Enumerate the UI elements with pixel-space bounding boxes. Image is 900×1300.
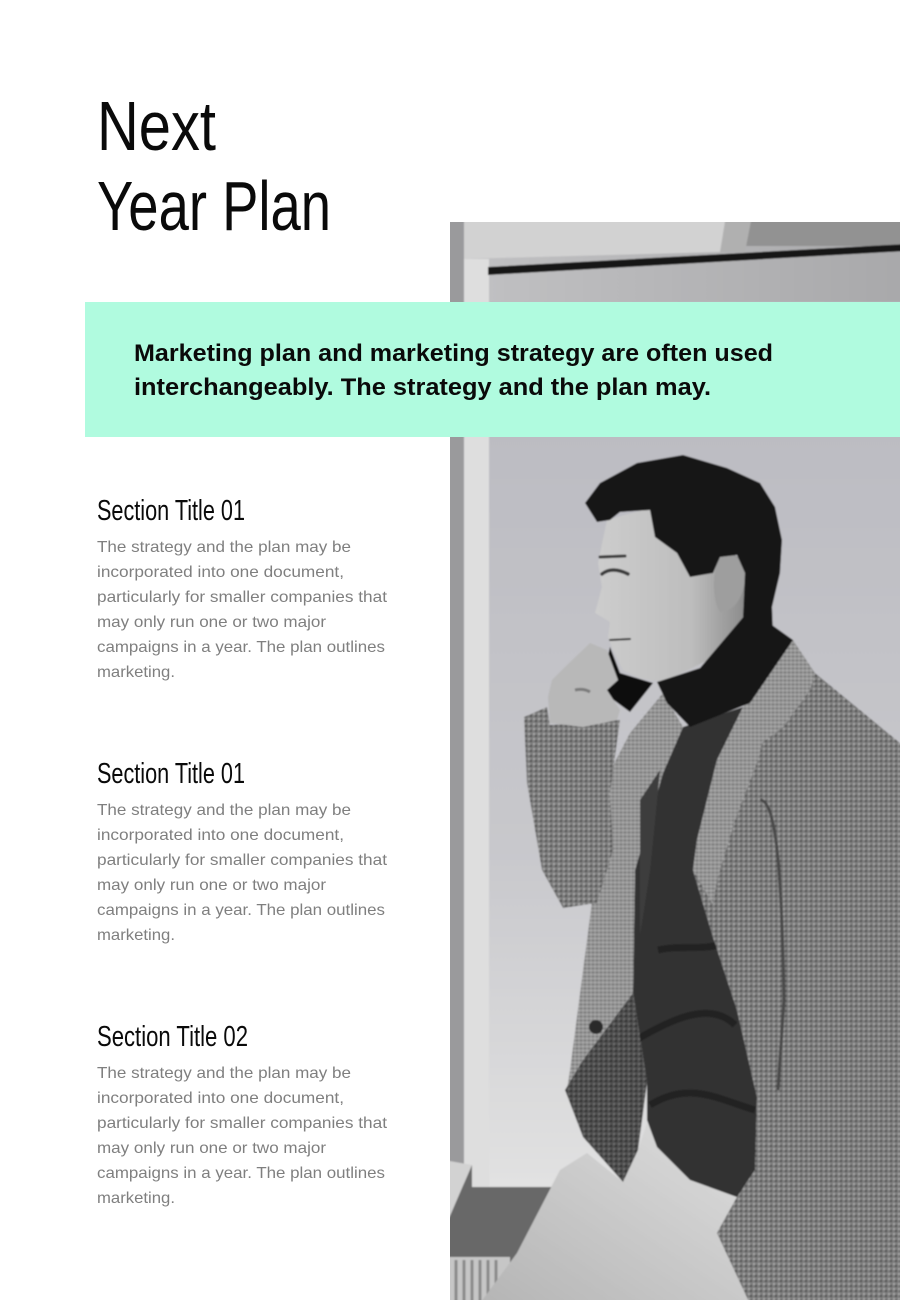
section 3 body: marketing. [97, 1190, 175, 1207]
jacket button [589, 1020, 603, 1034]
banner text [134, 340, 773, 401]
title [97, 87, 331, 245]
banner text: Marketing plan and marketing strategy are often used [134, 340, 773, 367]
section 1 [97, 495, 388, 681]
mint banner [85, 302, 900, 437]
section 3 body: incorporated into one document, [97, 1090, 344, 1107]
section 2 body: marketing. [97, 927, 175, 944]
section 2 [97, 758, 388, 944]
title line 2: Year Plan [97, 167, 331, 245]
photo background: floor and vent [450, 1160, 552, 1300]
section 3 body [97, 1065, 388, 1207]
face [596, 514, 746, 674]
photo background: wall and door [450, 222, 900, 1187]
section 3 [97, 1021, 388, 1207]
section 1 body: The strategy and the plan may be [97, 539, 351, 556]
hand finger shadow [575, 689, 590, 692]
section 2 heading: Section Title 01 [97, 758, 245, 790]
title line 1: Next [97, 87, 216, 165]
section 1 body: incorporated into one document, [97, 564, 344, 581]
jacket body and right sleeve [693, 673, 900, 1300]
phone [606, 647, 654, 712]
section 2 body: campaigns in a year. The plan outlines [97, 902, 385, 919]
section 3 body: The strategy and the plan may be [97, 1065, 351, 1082]
section 3 heading: Section Title 02 [97, 1021, 248, 1053]
section 1 body: particularly for smaller companies that [97, 589, 388, 606]
section 1 heading: Section Title 01 [97, 495, 245, 527]
jacket right lapel [693, 640, 815, 905]
section 2 body: The strategy and the plan may be [97, 802, 351, 819]
ear [714, 558, 746, 604]
hair [585, 455, 782, 633]
jacket inner dark flap [565, 993, 647, 1182]
section 1 body: may only run one or two major [97, 614, 327, 631]
raised arm sleeve [524, 707, 620, 908]
section 1 body: campaigns in a year. The plan outlines [97, 639, 385, 656]
section 2 body [97, 802, 388, 944]
banner text: interchangeably. The strategy and the plan may. [134, 374, 711, 401]
section 2 body: incorporated into one document, [97, 827, 344, 844]
jacket left front [567, 693, 683, 1090]
section 3 body: particularly for smaller companies that [97, 1115, 388, 1132]
jacket inner shadow band [640, 770, 660, 935]
section 2 body: particularly for smaller companies that [97, 852, 388, 869]
photo: man on the phone [444, 216, 900, 1300]
section 1 body: marketing. [97, 664, 175, 681]
sweater [633, 707, 757, 1197]
trousers [478, 1123, 751, 1300]
jacket sleeve seam [760, 800, 784, 1090]
section 3 body: campaigns in a year. The plan outlines [97, 1165, 385, 1182]
eye and mouth details [600, 556, 630, 640]
turtleneck [657, 615, 793, 727]
hand [548, 643, 620, 727]
section 1 body [97, 539, 388, 681]
sweater folds [636, 945, 755, 1110]
section 2 body: may only run one or two major [97, 877, 327, 894]
section 3 body: may only run one or two major [97, 1140, 327, 1157]
